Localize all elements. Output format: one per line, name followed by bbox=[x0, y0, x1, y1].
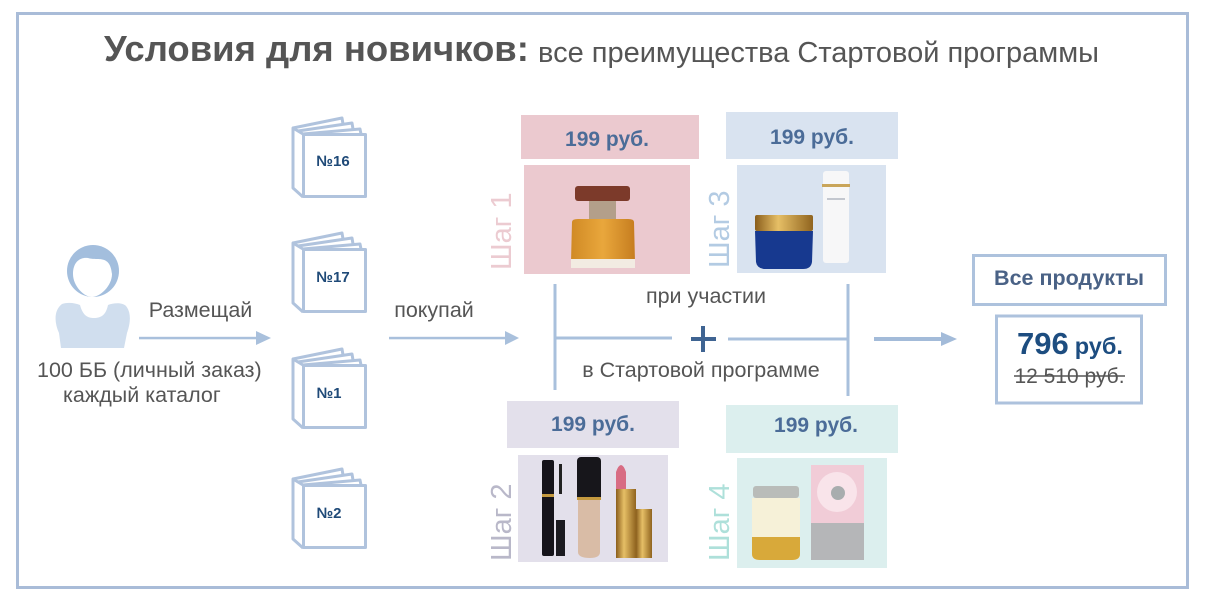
title: Условия для новичков: bbox=[104, 28, 529, 69]
arrow: to steps bbox=[389, 331, 519, 345]
text: при участии: при участии bbox=[646, 284, 766, 308]
box: total price: 12 510 руб. bbox=[1014, 365, 1125, 388]
icon: person bbox=[56, 245, 130, 348]
catalogue №2 bbox=[293, 469, 366, 548]
plus sign bbox=[691, 326, 716, 352]
step 2 product: make-up bbox=[518, 455, 668, 562]
arrow: to catalogues bbox=[139, 331, 271, 345]
box: total price: 796 руб. bbox=[1017, 326, 1123, 361]
step 2 price: 199 руб. bbox=[551, 413, 635, 436]
step 4 product: jar and mask bbox=[737, 458, 887, 568]
text: в Стартовой программе: в Стартовой программе bbox=[582, 358, 820, 382]
step 2 price bbox=[507, 401, 679, 448]
step 4 price: 199 руб. bbox=[774, 414, 858, 437]
step 4 label: Шаг 4 bbox=[704, 484, 736, 561]
catalogue №16 bbox=[293, 118, 366, 197]
step 3 price bbox=[726, 112, 898, 159]
catalogue №17 bbox=[293, 233, 366, 312]
catalogue №17: №17 bbox=[316, 269, 350, 286]
catalogue №2: №2 bbox=[316, 505, 342, 522]
catalogue №16: №16 bbox=[316, 153, 350, 170]
step 4 price bbox=[726, 405, 898, 453]
text: 100 BB personal order: 100 ББ (личный заказ) bbox=[37, 358, 262, 382]
catalogue №1: №1 bbox=[316, 385, 342, 402]
box: all products bbox=[974, 256, 1166, 304]
arrow: to result bbox=[874, 332, 957, 346]
box: all products: Все продукты bbox=[994, 266, 1144, 290]
box: total price bbox=[996, 316, 1142, 403]
step 2 label: Шаг 2 bbox=[486, 484, 518, 561]
step 1 label: Шаг 1 bbox=[486, 193, 518, 270]
step 1 product: perfume bbox=[524, 165, 690, 274]
step 3 price: 199 руб. bbox=[770, 126, 854, 149]
step 3 product: cream and bottle bbox=[737, 165, 886, 273]
step 1 price bbox=[521, 115, 699, 159]
step 3 label: Шаг 3 bbox=[704, 191, 736, 268]
bracket: steps connector bbox=[555, 284, 848, 396]
step 1 price: 199 руб. bbox=[565, 128, 649, 151]
text: 100 BB personal order: каждый каталог bbox=[63, 383, 221, 407]
label: покупай: покупай bbox=[394, 298, 474, 322]
label: Размещай: Размещай bbox=[149, 298, 252, 322]
catalogue №1 bbox=[293, 349, 366, 428]
title: все преимущества Стартовой программы bbox=[538, 37, 1099, 69]
